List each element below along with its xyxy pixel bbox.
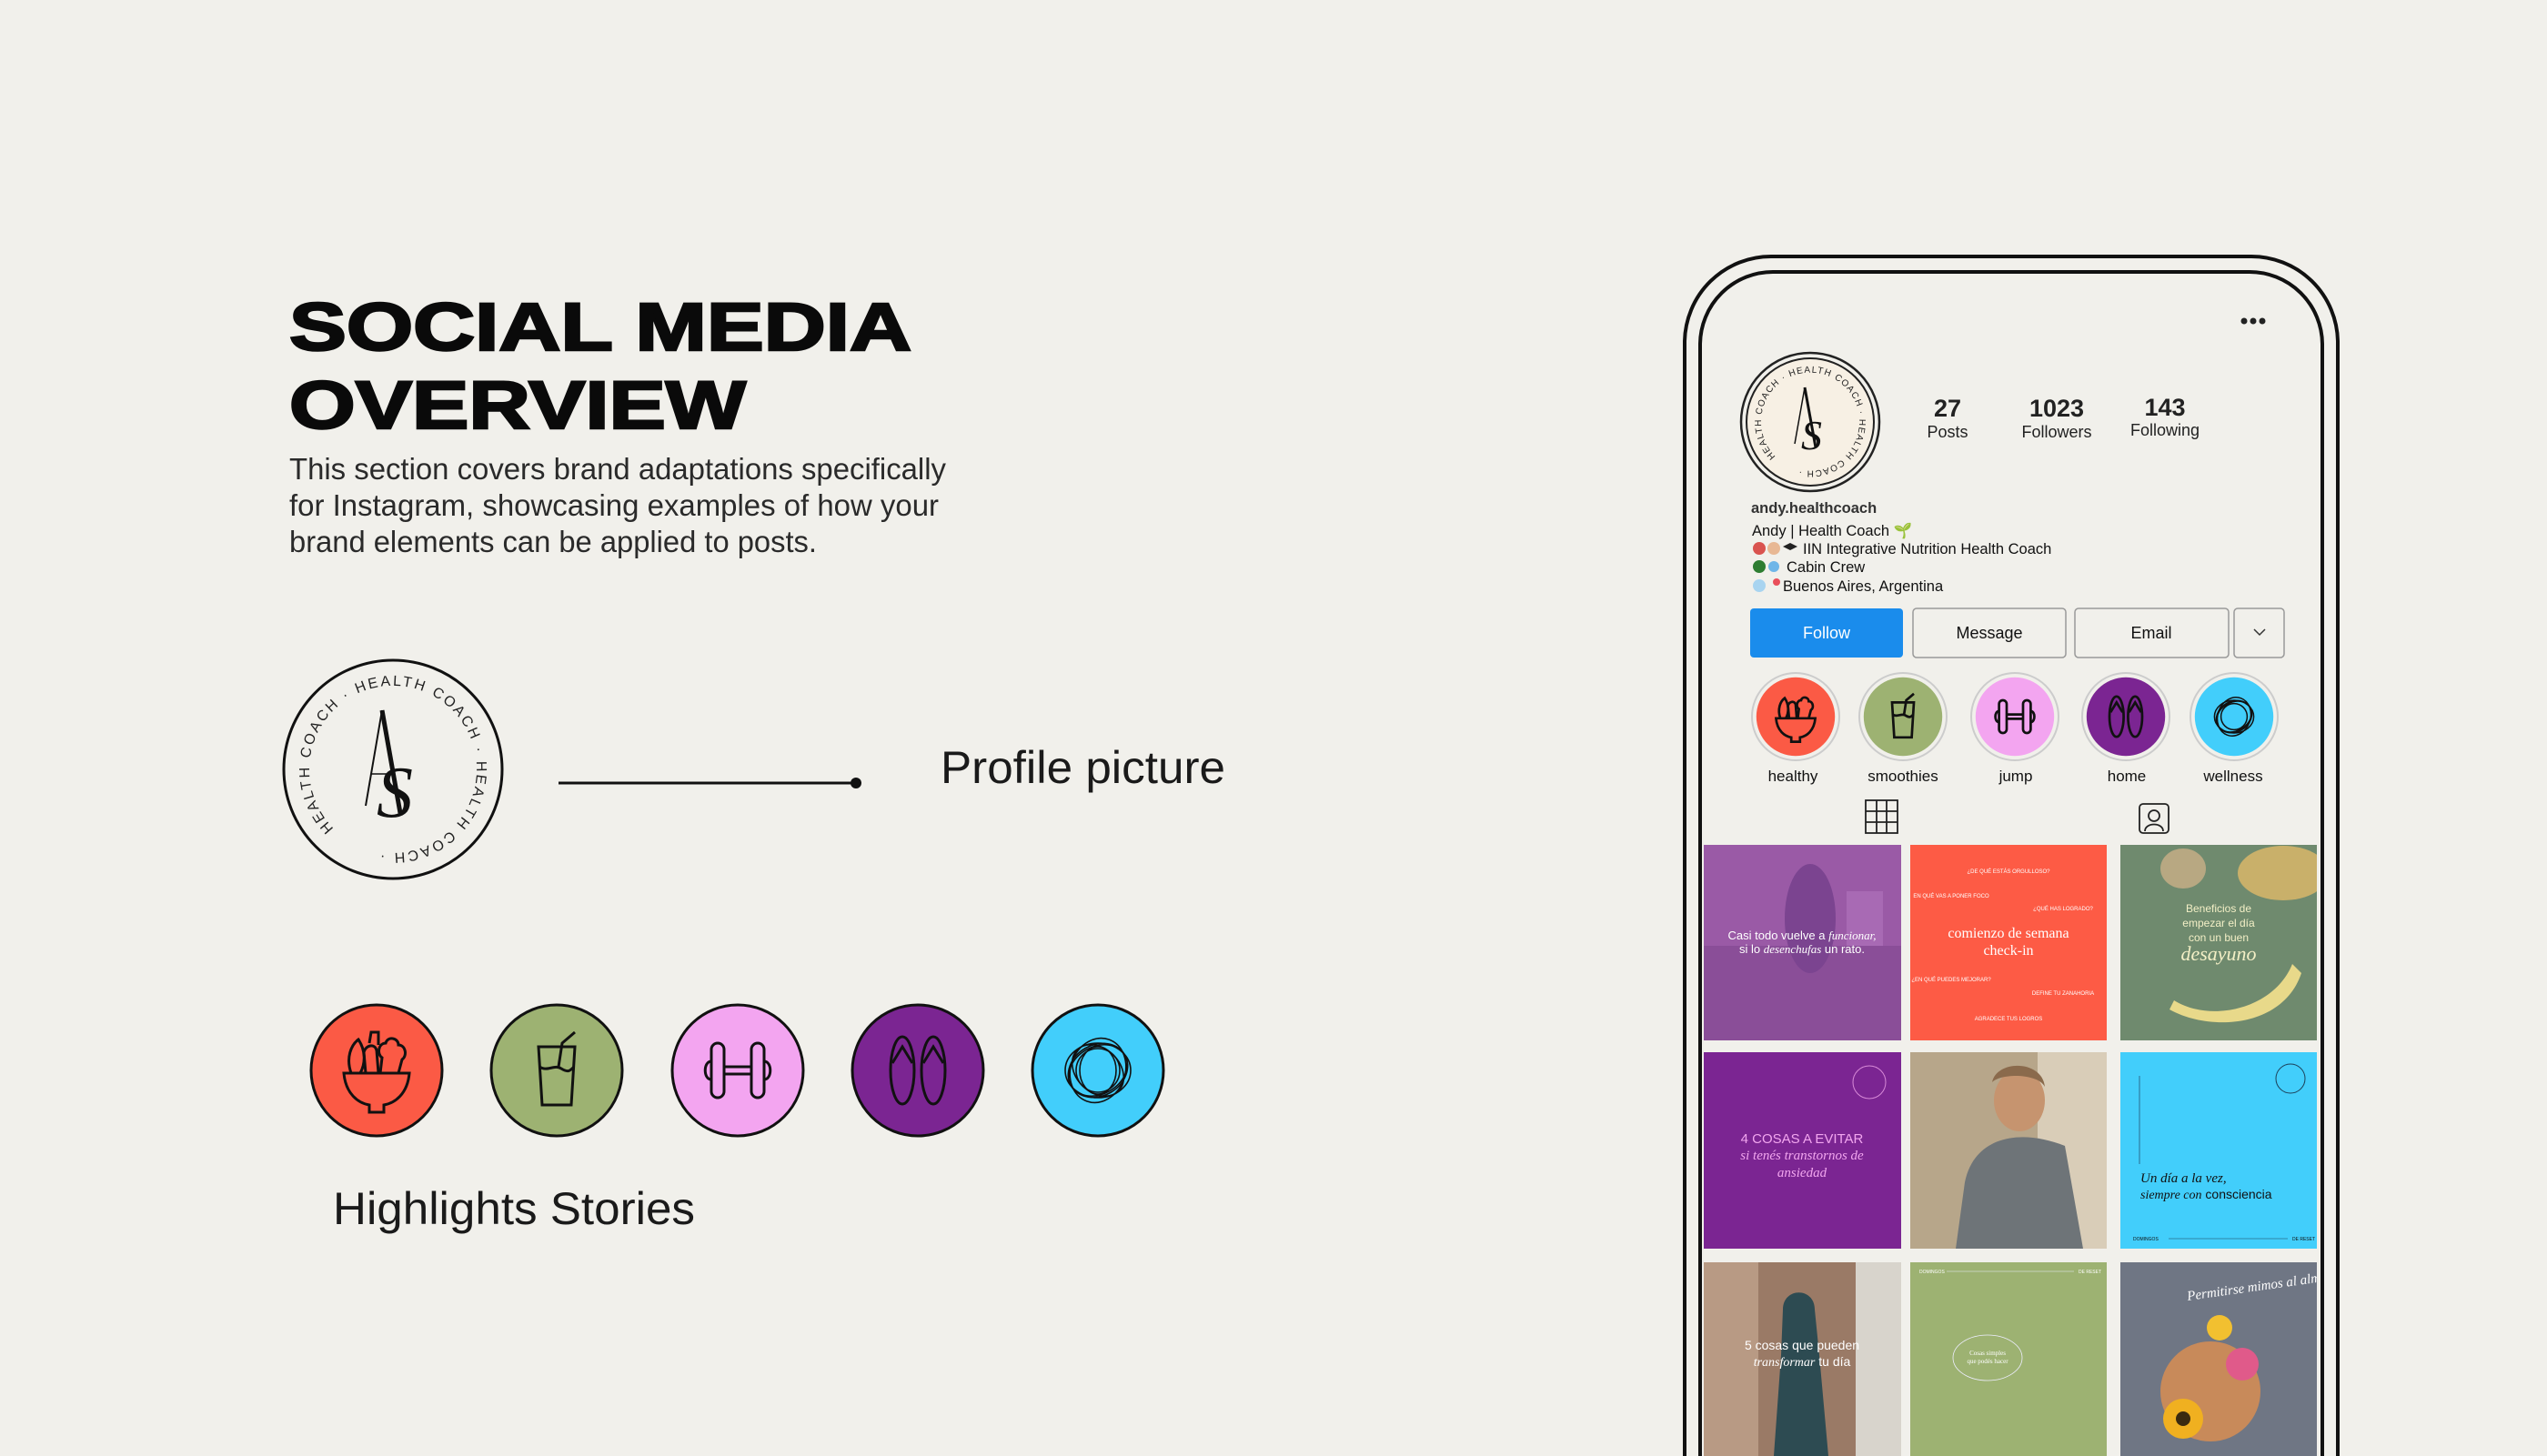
post 9: Permitirse mimos al alma bbox=[2185, 1270, 2328, 1304]
post 1 bbox=[1704, 845, 1901, 1040]
post 4: 4 COSAS A EVITAR bbox=[1741, 1131, 1864, 1147]
post 6: siempre con consciencia bbox=[2140, 1187, 2272, 1202]
title: OVERVIEW bbox=[289, 367, 746, 443]
label: profile picture: Profile picture bbox=[941, 742, 1225, 793]
logo: profile picture: S bbox=[377, 753, 413, 833]
post 7: 5 cosas que pueden bbox=[1745, 1338, 1859, 1352]
icon: healthy bowl bbox=[311, 1005, 442, 1136]
post 5 bbox=[1910, 1052, 2107, 1249]
post 1: si lo desenchufas un rato. bbox=[1739, 942, 1865, 956]
tab icons bbox=[1866, 800, 2169, 833]
bio: Buenos Aires, Argentina bbox=[1783, 578, 1944, 595]
icon: dumbbell bbox=[672, 1005, 803, 1136]
stats: 143 bbox=[2144, 394, 2186, 421]
buttons: Message bbox=[1956, 624, 2023, 642]
story highlights: jump bbox=[1998, 768, 2032, 785]
icon: wellness spiral bbox=[1032, 1005, 1163, 1136]
stats: Followers bbox=[2021, 423, 2092, 441]
intro paragraph bbox=[289, 452, 946, 558]
label: highlights stories: Highlights Stories bbox=[333, 1183, 695, 1234]
post 8: Cosas simples bbox=[1969, 1350, 2006, 1357]
menu dots bbox=[2241, 318, 2265, 324]
post 8 bbox=[1910, 1262, 2107, 1456]
intro paragraph: brand elements can be applied to posts. bbox=[289, 525, 817, 558]
post 2: comienzo de semana bbox=[1948, 926, 2069, 941]
post 6: DE RESET bbox=[2292, 1237, 2315, 1242]
post 8: que podés hacer bbox=[1967, 1358, 2008, 1365]
avatar: HEALTH COACH · HEALTH COACH · HEALTH COACH · bbox=[1755, 366, 1866, 477]
post 2: check-in bbox=[1983, 943, 2034, 959]
bio: Andy | Health Coach 🌱 bbox=[1752, 522, 1912, 539]
highlight circles row bbox=[311, 1005, 1163, 1136]
icon: smoothie cup bbox=[491, 1005, 622, 1136]
buttons: Follow bbox=[1803, 624, 1851, 642]
title bbox=[289, 289, 911, 443]
connector arrow bbox=[559, 778, 861, 788]
post 4: si tenés transtornos de bbox=[1740, 1149, 1864, 1163]
post 2: ¿DE QUÉ ESTÁS ORGULLOSO? bbox=[1967, 869, 2050, 875]
stats bbox=[1927, 394, 2200, 441]
bio: andy.healthcoach bbox=[1751, 500, 1877, 517]
buttons bbox=[1750, 608, 2284, 658]
post 8: DOMINGOS bbox=[1919, 1270, 1945, 1275]
icon: flip flops bbox=[852, 1005, 983, 1136]
post 1: Casi todo vuelve a funcionar, bbox=[1728, 929, 1876, 942]
story highlights: healthy bbox=[1768, 768, 1818, 785]
post 2: EN QUÉ VAS A PONER FOCO bbox=[1913, 893, 1989, 899]
post 3: con un buen bbox=[2189, 931, 2249, 944]
post 3: empezar el día bbox=[2182, 917, 2255, 929]
story highlights: wellness bbox=[2202, 768, 2263, 785]
post 8: DE RESET bbox=[2079, 1270, 2101, 1275]
post 2 bbox=[1910, 845, 2107, 1040]
post 3 bbox=[2120, 845, 2329, 1040]
story highlights bbox=[1752, 673, 2278, 785]
bio bbox=[1751, 500, 2051, 595]
post 4 bbox=[1704, 1052, 1901, 1249]
title: SOCIAL MEDIA bbox=[289, 289, 911, 365]
intro paragraph: for Instagram, showcasing examples of how your bbox=[289, 488, 939, 522]
post 6: Un día a la vez, bbox=[2140, 1171, 2227, 1186]
phone mockup bbox=[1683, 255, 2340, 1456]
avatar: S bbox=[1801, 412, 1822, 458]
stats: 27 bbox=[1934, 395, 1961, 422]
post 2: DEFINE TU ZANAHORIA bbox=[2032, 991, 2094, 997]
avatar bbox=[1739, 351, 1881, 493]
post 2: AGRADECE TUS LOGROS bbox=[1975, 1017, 2042, 1022]
buttons: Email bbox=[2130, 624, 2172, 642]
stats: 1023 bbox=[2029, 395, 2084, 422]
post 3: desayuno bbox=[2180, 942, 2257, 965]
logo: profile picture: HEALTH COACH · HEALTH COACH · HEALTH COACH · bbox=[299, 675, 488, 863]
stats: Posts bbox=[1927, 423, 1968, 441]
bio: Cabin Crew bbox=[1787, 559, 1865, 576]
bio: IIN Integrative Nutrition Health Coach bbox=[1803, 541, 2051, 557]
post 9 bbox=[2120, 1262, 2328, 1456]
intro paragraph: This section covers brand adaptations specifically bbox=[289, 452, 946, 486]
post 6 bbox=[2120, 1052, 2317, 1249]
story highlights: home bbox=[2108, 768, 2146, 785]
story highlights: smoothies bbox=[1867, 768, 1938, 785]
post 7 bbox=[1704, 1262, 1901, 1456]
posts grid bbox=[1704, 845, 2329, 1456]
post 2: ¿EN QUÉ PUEDES MEJORAR? bbox=[1911, 977, 1991, 983]
post 6: DOMINGOS bbox=[2133, 1237, 2159, 1242]
post 3: Beneficios de bbox=[2186, 902, 2251, 915]
stats: Following bbox=[2130, 421, 2200, 439]
post 7: transformar tu día bbox=[1754, 1354, 1851, 1370]
post 4: ansiedad bbox=[1777, 1166, 1827, 1180]
post 2: ¿QUÉ HAS LOGRADO? bbox=[2033, 906, 2094, 912]
